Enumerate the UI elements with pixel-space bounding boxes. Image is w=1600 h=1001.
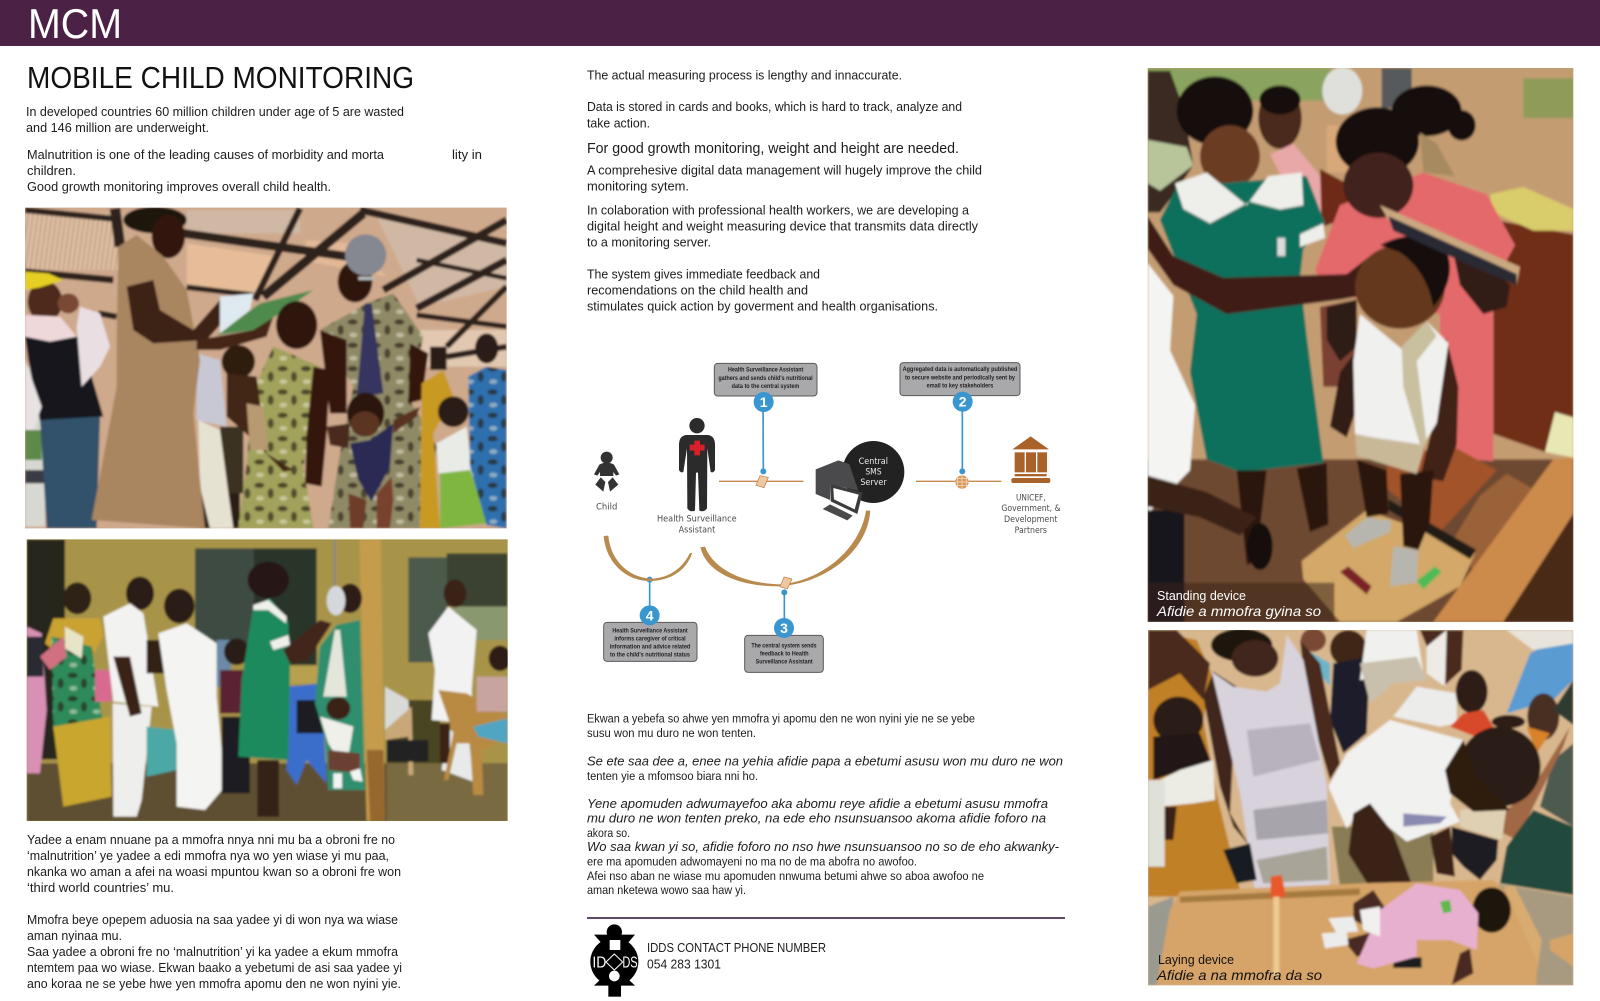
scale and baby — [327, 586, 345, 615]
device — [1302, 510, 1477, 622]
left woman — [25, 337, 103, 422]
text block: malnutrition in Twi: ntemtem paa wo wiase. Ekwan baako a yebetumi de asi saa yadee yi — [27, 960, 402, 975]
text block: malnutrition in Twi: nkanka wo aman a afei na woasi mpuntou kwan so a obroni fre won — [27, 864, 401, 879]
callout 3: Surveillance Assistant — [756, 659, 813, 666]
step badge 3: 3 — [780, 620, 788, 636]
nurse — [123, 207, 187, 233]
text block: problem and solution: A comprehesive digital data management will hugely improve the child — [587, 162, 982, 178]
icon: child — [594, 452, 619, 492]
icon: institution building — [1011, 436, 1050, 483]
text block: Twi explanation — [587, 712, 1063, 897]
label: child: Child — [596, 502, 617, 512]
icon: health surveillance assistant — [679, 418, 715, 511]
text block: malnutrition in Twi: Mmofra beye opepem aduosia na saa yadee yi di won nya wa wiase — [27, 912, 398, 927]
text block: problem and solution: For good growth monitoring, weight and height are needed. — [587, 141, 959, 157]
link line: server to partners — [916, 479, 1001, 483]
table — [1320, 169, 1353, 227]
connector 3 — [781, 589, 787, 628]
icon: central SMS server — [816, 441, 904, 520]
text block: problem and solution: monitoring sytem. — [587, 178, 689, 194]
text block: problem and solution: The system gives immediate feedback and — [587, 266, 820, 282]
connector 4 — [647, 577, 653, 615]
text block: problem and solution: The actual measuring process is lengthy and innaccurate. — [587, 68, 902, 82]
text block: Twi explanation: akora so. — [587, 826, 630, 840]
callout 2: to secure website and periodically sent by — [905, 374, 1015, 381]
text block: malnutrition in Twi: ‘malnutrition’ ye yadee a edi mmofra nya wo yen wiase yi mu paa, — [27, 848, 389, 863]
text block: Twi explanation: mu duro ne won tenten preko, na ede eho nsunsuansoo akoma afidie foforo na — [587, 810, 1046, 826]
scale and post — [1322, 67, 1362, 114]
left woman — [1148, 71, 1193, 212]
text block: introduction: children. — [27, 163, 76, 178]
text block: introduction: Malnutrition is one of the leading causes of morbidity and morta — [27, 147, 385, 162]
text block: introduction: and 146 million are underweight. — [26, 120, 209, 135]
right side — [385, 687, 410, 730]
text block: Twi explanation: Afei nso aban ne wiase mu apomuden nnwuma betumi ahwe so aboa awofoo ne — [587, 869, 984, 883]
step badge 3 — [774, 618, 794, 638]
right people — [1506, 642, 1574, 714]
label: partners: Development — [1004, 515, 1058, 525]
step badge 1: 1 — [760, 394, 768, 410]
label: partners: Partners — [1015, 526, 1047, 536]
text block: introduction: lity in — [452, 147, 482, 162]
text block: Twi explanation: Se ete saa dee a, enee na yehia afidie papa a ebetumi asusu won mu duro ne won — [587, 754, 1063, 768]
callout 4: informs caregiver of critical — [614, 636, 686, 643]
photo: standing device measuring a toddler — [1140, 60, 1580, 626]
nurse — [1177, 76, 1253, 145]
man in white — [1332, 827, 1433, 890]
text block: contact phone number: 054 283 1301 — [647, 956, 721, 972]
caption: standing device: Standing device — [1157, 588, 1246, 603]
text block: malnutrition in Twi: Saa yadee a obroni fre no ‘malnutrition’ yi ka yadee a ekum mmofra — [27, 944, 399, 959]
man — [126, 577, 154, 610]
text block: malnutrition in Twi: ‘third world countries’ mu. — [27, 880, 174, 895]
text block: problem and solution: stimulates quick action by goverment and health organisations. — [587, 298, 938, 314]
step badge 4 — [640, 605, 660, 625]
text block: Twi explanation: Wo saa kwan yi so, afidie foforo no nso hwe nsunsuansoo no so de eho akwanky- — [587, 839, 1060, 854]
step badge 4: 4 — [646, 607, 654, 623]
text block: Twi explanation: Yene apomuden adwumayefoo aka abomu reye afidie a ebetumi asusu mmofra — [587, 796, 1048, 811]
header band — [0, 0, 1600, 47]
text block: Twi explanation: Ekwan a yebefa so ahwe yen mmofra yi apomu den ne won nyini yie ne se yebe — [587, 712, 975, 726]
pink woman — [1315, 173, 1515, 461]
left woman with baby — [1148, 630, 1240, 897]
header title: MCM: MCM — [28, 0, 122, 47]
step badge 2 — [953, 392, 973, 412]
text block: malnutrition in Twi: ano koraa ne se yebe hwe yen mmofra apomu den ne won nyini yie. — [27, 976, 401, 991]
right woman — [338, 261, 372, 302]
label: partners: UNICEF, — [1016, 494, 1046, 504]
caption: standing device: Afidie a mmofra gyina so — [1156, 603, 1321, 619]
label: health surveillance assistant — [657, 515, 737, 536]
callout 1: Health Surveillance Assistant — [728, 367, 804, 374]
label: health surveillance assistant: Health Surveillance — [657, 515, 737, 525]
callout 4: Health Surveillance Assistant — [612, 627, 688, 634]
back woman — [1392, 85, 1462, 136]
heading: mobile child monitoring: MOBILE CHILD MONITORING — [27, 61, 414, 95]
icon: IDDS logo: ID — [592, 955, 606, 972]
step badge 1 — [754, 392, 774, 412]
callout 3: The central system sends — [751, 642, 817, 649]
label: partners — [1001, 494, 1061, 536]
callout 1: data to the central system — [732, 383, 800, 390]
photo: nurse in green weighing baby on veranda — [20, 530, 520, 830]
text block: problem and solution: recomendations on the child health and — [587, 282, 808, 298]
callout 4: to the child's nutritional status — [610, 652, 690, 659]
blue chair — [287, 683, 327, 785]
nurse — [248, 562, 289, 598]
caption backing — [1148, 583, 1334, 622]
system flow diagram — [594, 363, 1061, 672]
text block: introduction — [26, 104, 482, 194]
woman with lavender dress — [1211, 628, 1272, 662]
text block: problem and solution: In colaboration with professional health workers, we are developing a — [587, 202, 970, 218]
callout 4: information and advice related — [610, 644, 690, 651]
icon: IDDS logo — [590, 924, 638, 997]
arc: assistant to child — [604, 536, 692, 581]
arc: server to assistant — [700, 511, 870, 586]
baby — [1472, 887, 1511, 933]
left person in white — [1148, 263, 1195, 514]
arm across — [1148, 216, 1370, 314]
woman behind scale — [338, 584, 362, 613]
callout 2: email to key stakeholders — [927, 382, 994, 389]
text block: Twi explanation: susu won mu duro ne won tenten. — [587, 726, 756, 740]
callout 2: Aggregated data is automatically published — [903, 366, 1017, 373]
text block: problem and solution — [587, 68, 982, 314]
callout 3 — [745, 635, 823, 672]
text block: contact phone number — [647, 940, 826, 972]
text block: problem and solution: digital height and weight measuring device that transmits data directly — [587, 218, 978, 234]
label: health surveillance assistant: Assistant — [679, 526, 716, 536]
measuring board — [1148, 897, 1173, 985]
girl behind — [1257, 104, 1303, 150]
text block: malnutrition in Twi: Yadee a enam nnuane pa a mmofra nnya nni mu ba a obroni fre no — [27, 832, 395, 847]
text block: problem and solution: Data is stored in cards and books, which is hard to track, analyze and — [587, 99, 962, 114]
icon: globe on link 2 — [955, 475, 969, 489]
text block: Twi explanation: aman nketewa wowo saa haw yi. — [587, 883, 746, 897]
callout 2 — [900, 363, 1020, 396]
connector 1 — [760, 402, 766, 474]
right people — [420, 370, 453, 528]
text block: Twi explanation: ere ma apomuden adwomayeni no ma no de ma abofra no awofoo. — [587, 854, 917, 868]
icon: central SMS server: Central — [859, 457, 888, 467]
icon: phone on feedback arc — [780, 577, 792, 589]
photo: nurse weighing baby under a tin roof — [20, 200, 520, 533]
benches — [1387, 445, 1497, 532]
callout 3: feedback to Health — [760, 651, 809, 658]
icon: phone on link 1 — [756, 476, 768, 488]
text block: contact phone number: IDDS CONTACT PHONE NUMBER — [647, 940, 826, 955]
caption: laying device: Afidie a na mmofra da so — [1156, 967, 1322, 983]
text block: introduction: Good growth monitoring improves overall child health. — [27, 179, 331, 194]
caption: laying device: Laying device — [1158, 952, 1234, 967]
text block: problem and solution: take action. — [587, 116, 650, 130]
center woman — [276, 301, 317, 349]
caption: laying device — [1156, 952, 1322, 983]
back centre — [1330, 630, 1367, 667]
text block: introduction: In developed countries 60 million children under age of 5 are wasted — [26, 104, 404, 119]
baby — [347, 393, 384, 434]
icon: central SMS server: SMS — [865, 467, 882, 477]
caption: standing device — [1156, 588, 1321, 619]
callout 1: gathers and sends child's nutritional — [718, 375, 813, 382]
toddler — [1330, 350, 1357, 438]
icon: central SMS server: Server — [860, 478, 887, 488]
step badge 2: 2 — [959, 394, 967, 410]
text block: malnutrition in Twi: aman nyinaa mu. — [27, 928, 122, 943]
text block: problem and solution: to a monitoring server. — [587, 234, 711, 250]
text block: Twi explanation: tenten yie a mfomsoo biara nni ho. — [587, 769, 758, 783]
text block: malnutrition in Twi — [27, 832, 402, 991]
icon: IDDS logo: DS — [622, 955, 638, 972]
callout 4 — [604, 622, 697, 661]
left woman — [27, 627, 47, 773]
callout 1 — [714, 363, 817, 396]
label: partners: Government, & — [1001, 504, 1061, 514]
middle back — [197, 353, 227, 427]
connector 2 — [959, 402, 965, 474]
woman in white — [164, 589, 195, 623]
link line: assistant to server — [719, 479, 803, 483]
photo: laying device measuring a baby — [1140, 620, 1580, 993]
